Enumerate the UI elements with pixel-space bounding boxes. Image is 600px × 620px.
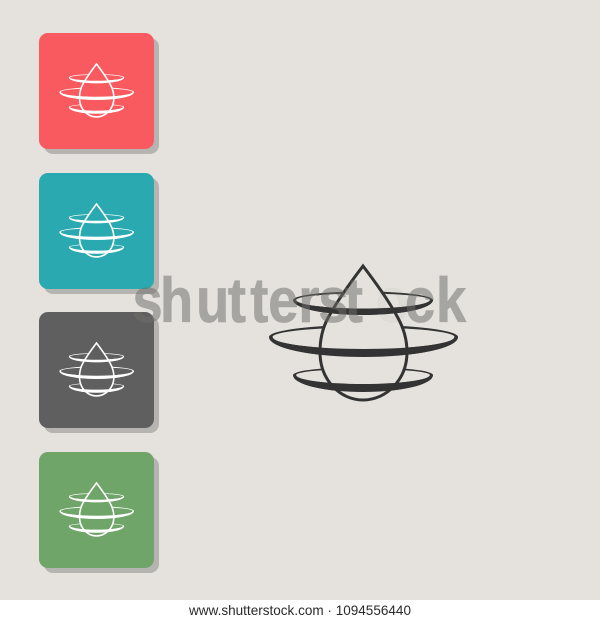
- panel: teal icon card: [39, 173, 159, 294]
- footer strip: [0, 600, 600, 620]
- panel: grey icon card: [39, 312, 159, 433]
- icon: teal card water drop with rings: [59, 204, 134, 257]
- icon: green card water drop with rings: [59, 483, 134, 536]
- icon: large water drop with rings: [269, 266, 458, 400]
- footer url text: www.shutterstock.com · 1094556440: [188, 602, 411, 618]
- icon: red card water drop with rings: [59, 64, 134, 117]
- watermark text: shutterstock: [132, 266, 466, 336]
- panel: red icon card: [39, 33, 159, 154]
- icon: grey card water drop with rings: [59, 343, 134, 396]
- panel: green icon card: [39, 452, 159, 573]
